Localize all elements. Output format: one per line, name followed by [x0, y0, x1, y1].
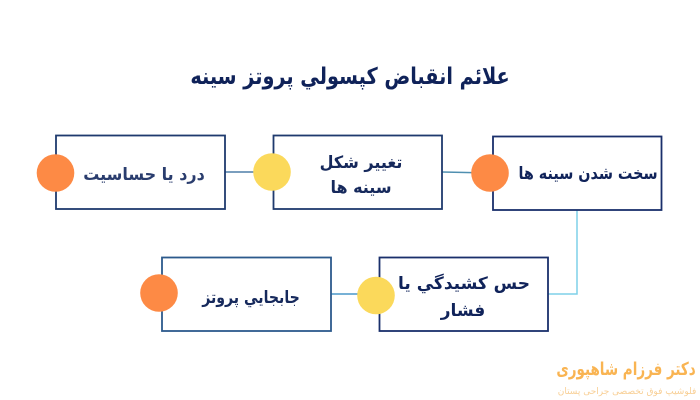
- label: change in breast shape: تغيير شكل: [320, 153, 402, 173]
- logo: doctor name: [556, 358, 696, 397]
- icon: yellow circle: [357, 277, 395, 314]
- logo: doctor name: دكتر فرزام شاهپوری: [556, 358, 696, 381]
- logo subtitle: فلوشيپ فوق تخصصی جراحی پستان: [558, 387, 696, 397]
- icon: yellow circle: [253, 153, 291, 191]
- connector: box 2 to box 1: [225, 171, 272, 173]
- label: feeling of tightness or pressure: [398, 273, 530, 321]
- icon: orange circle: [140, 274, 178, 312]
- connector: box 3 to box 4: [548, 210, 577, 294]
- label: feeling of tightness or pressure: فشار: [440, 301, 485, 321]
- panel: implant displacement: [140, 258, 331, 331]
- label: implant displacement: جابجايي پروتز: [201, 288, 300, 308]
- label: change in breast shape: سينه ها: [330, 178, 392, 197]
- panel: feeling of tightness or pressure: [357, 258, 548, 331]
- label: feeling of tightness or pressure: حس كشيدگي يا: [398, 273, 530, 294]
- label: change in breast shape: [320, 153, 402, 197]
- icon: orange circle: [37, 154, 74, 192]
- panel: pain or sensitivity: [37, 136, 225, 209]
- connector: box 3 to box 2: [442, 172, 490, 173]
- connector: box 4 to box 5: [331, 293, 376, 295]
- panel: breast hardening: [471, 136, 662, 210]
- label: pain or sensitivity: درد يا حساسيت: [83, 165, 205, 184]
- icon: orange circle: [471, 154, 509, 192]
- title: علائم انقباض کپسولي پروتز سينه: [190, 62, 510, 89]
- panel: change in breast shape: [253, 136, 442, 209]
- label: breast hardening: سخت شدن سينه ها: [518, 163, 658, 183]
